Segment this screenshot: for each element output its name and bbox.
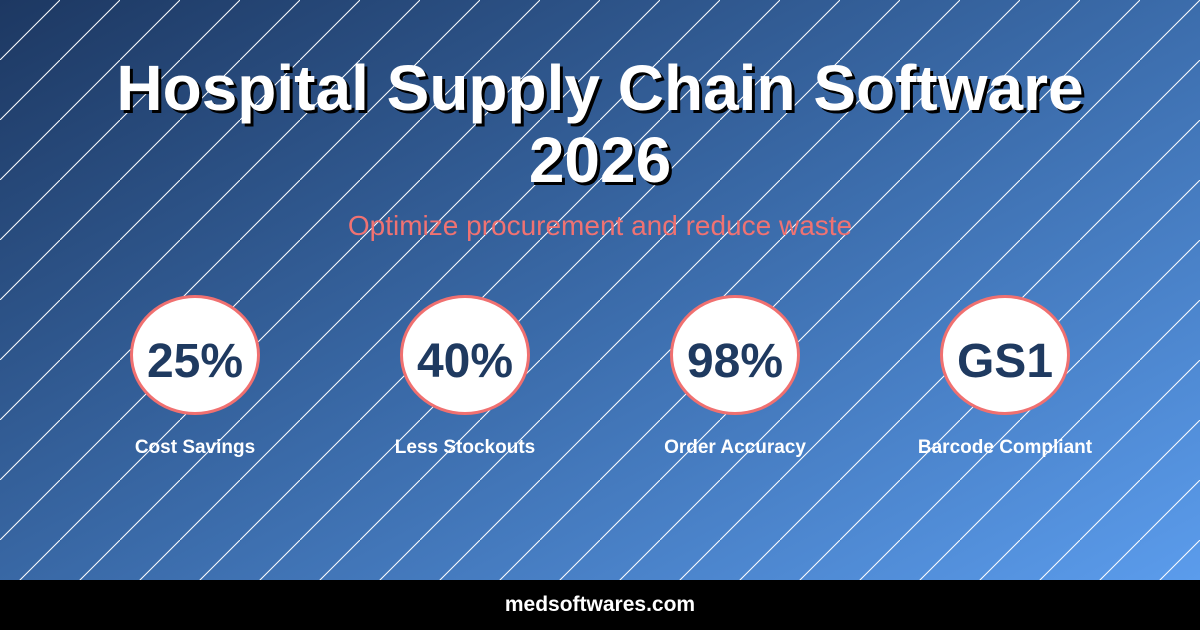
footer <box>0 580 1200 630</box>
stat: barcode compliant: GS1 <box>957 335 1053 388</box>
stat: cost savings <box>130 295 260 458</box>
stat: barcode compliant: Barcode Compliant <box>918 437 1092 458</box>
stat: less stockouts <box>395 295 535 458</box>
stat: less stockouts: 40% <box>417 335 513 388</box>
footer: medsoftwares.com <box>505 593 695 616</box>
title <box>116 52 1084 196</box>
stat: less stockouts: Less Stockouts <box>395 437 535 458</box>
stat: order accuracy: Order Accuracy <box>664 437 806 458</box>
title: 2026 <box>529 124 671 196</box>
stat: cost savings: 25% <box>147 335 243 388</box>
stat: barcode compliant <box>918 295 1092 458</box>
title: Hospital Supply Chain Software <box>116 52 1084 124</box>
stat: order accuracy: 98% <box>687 335 783 388</box>
subtitle: Optimize procurement and reduce waste <box>348 210 852 241</box>
stat: cost savings: Cost Savings <box>135 437 255 458</box>
stat: order accuracy <box>664 295 806 458</box>
